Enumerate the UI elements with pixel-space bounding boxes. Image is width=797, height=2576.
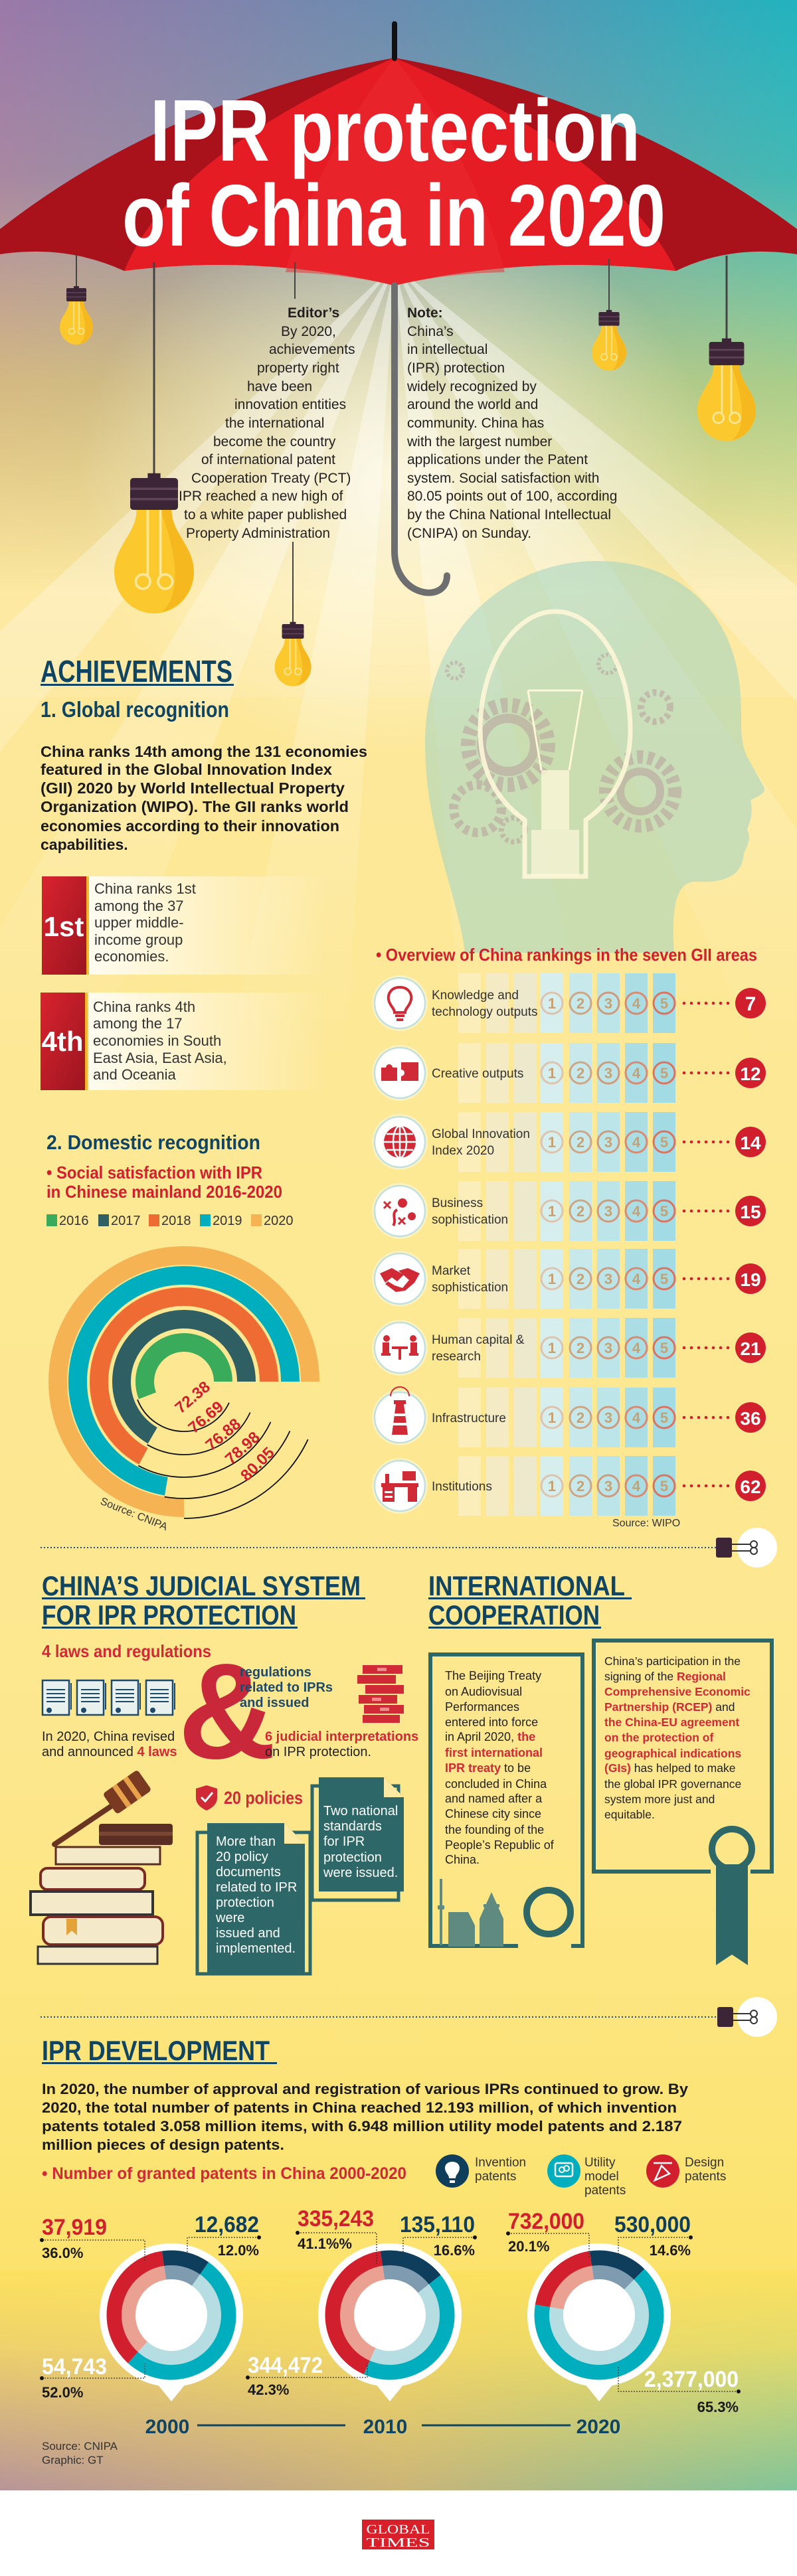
ranking row: global innovation index: 2 [576,1134,584,1151]
bulb: left small [60,254,93,345]
panel: RCEP participation: Partnership (RCEP) and [604,1700,735,1714]
ranking row: market sophistication: 19 [740,1269,761,1290]
panel: Beijing Treaty: first international [445,1746,543,1759]
ranking row: business sophistication: Business [432,1196,483,1210]
editor's note left: become the country [213,434,336,449]
editor's note right: in intellectual [407,342,487,357]
title [122,82,665,264]
text: 6 judicial interpretations [265,1730,418,1759]
subheading: 20 policies: 20 policies [224,1788,303,1808]
title: IPR protection [150,82,640,179]
illustration: gavel and books [31,1769,173,1964]
ranking row: institutions: 2 [576,1478,584,1494]
divider with bulb 1 [41,1528,777,1568]
donut: 2000: 12,682 [195,2212,259,2237]
timeline: years [145,2416,620,2438]
chart title: GII rankings: • Overview of China rankings in the seven GII areas [376,945,757,965]
text: IPR development paragraph: In 2020, the number of approval and registration of various IPRs continued to grow. By [42,2081,689,2097]
text: regulations related to IPRs: related to IPRs [240,1680,333,1695]
subheading: global recognition: 1. Global recognition [41,697,229,722]
panel: RCEP participation: China’s participation in the [604,1654,741,1668]
ranking row: infrastructure: 2 [576,1409,584,1426]
source and credit [42,2440,118,2466]
ranking row: knowledge and technology outputs: 3 [604,995,612,1012]
callout: 4th: East Asia, East Asia, [93,1050,227,1066]
text: IPR development paragraph: patents totaled 3.058 million items, with 6.948 million utility model patents and 2.187 [42,2118,682,2134]
ranking row: knowledge and technology outputs: Knowledge and [432,989,519,1003]
editor's note left: to a white paper published [184,507,347,523]
panel: RCEP participation: system more just and [604,1793,715,1806]
panel: Beijing Treaty: The Beijing Treaty [445,1669,541,1682]
ranking row: market sophistication: 1 [548,1271,556,1287]
text: revised 4 laws [42,1730,177,1759]
text: global recognition paragraph: (GII) 2020 by World Intellectual Property [41,779,345,797]
ring chart: satisfaction: 76.69 [185,1398,227,1437]
ranking row: human capital & research [372,1318,766,1378]
callout: 4th: China ranks 4th [93,999,195,1015]
chart title: social satisfaction [46,1163,282,1202]
subheading: domestic recognition: 2. Domestic recognition [46,1131,260,1154]
document: more than 20 policy documents: implemented. [216,1941,296,1956]
umbrella handle [395,285,447,593]
ranking row: business sophistication [372,1181,766,1241]
donut: 2000 [40,2212,261,2401]
legend: patent types: Design [685,2156,724,2170]
head silhouette with gears and bulb [425,561,764,953]
bulb: right small [592,259,626,370]
editor's note left: property right [257,361,339,376]
editor's note left: Cooperation Treaty (PCT) [191,471,351,486]
panel: RCEP participation: the China-EU agreement [604,1716,739,1729]
text: global recognition paragraph: China ranks 14th among the 131 economies [41,743,367,760]
ranking row: creative outputs: 3 [604,1065,612,1082]
legend: years: 2020 [264,1214,294,1228]
subheading: 4 laws and regulations: 4 laws and regulations [42,1641,211,1661]
editor's note left: achievements [269,342,355,357]
panel: RCEP participation [594,1641,772,1965]
ranking row: market sophistication: 4 [632,1271,641,1287]
ranking row: human capital & research: 4 [632,1340,641,1356]
document: more than 20 policy documents: 20 policy [216,1850,268,1864]
donut: 2000: 52.0% [42,2384,83,2401]
donut: 2000: 54,743 [42,2354,107,2379]
legend: patent types: patents [475,2170,516,2184]
panel: RCEP participation: geographical indications [604,1747,741,1760]
callout: 4th: among the 17 [93,1015,183,1032]
legend: years: 2018 [161,1214,191,1228]
ranking row: human capital & research: 1 [548,1340,556,1356]
ranking row: business sophistication: 15 [740,1202,761,1222]
panel: Beijing Treaty: China. [445,1853,480,1866]
source: WIPO: Source: WIPO [612,1518,680,1529]
ring chart: satisfaction: 72.38 [172,1378,214,1417]
donut: 2010: 344,472 [248,2353,323,2378]
callout: 1st: 1st [44,911,84,942]
panel: Beijing Treaty: IPR treaty to be [445,1761,531,1775]
document: two national standards: Two national [323,1804,398,1818]
text: 6 judicial interpretations: 6 judicial interpretations [265,1730,418,1744]
ranking row: knowledge and technology outputs: 4 [632,995,641,1012]
callout: 1st: China ranks 1st [94,880,196,897]
document: more than 20 policy documents: documents [216,1865,281,1880]
ranking row: global innovation index: Index 2020 [432,1144,494,1158]
text: IPR development paragraph: 2020, the total number of patents in China reached 12.193 million, of which invention [42,2099,677,2116]
editor's note right: China’s [407,324,454,339]
ranking row: business sophistication: 1 [548,1203,556,1220]
ranking row: infrastructure [372,1387,766,1447]
callout: 1st: income group [94,931,183,948]
source and credit: Graphic: GT [42,2454,104,2466]
editor's note left [179,305,355,541]
panel: RCEP participation: Comprehensive Economic [604,1685,751,1698]
editor's note right: with the largest number [406,434,552,449]
ranking row: institutions: 3 [604,1478,612,1494]
ranking row: market sophistication: sophistication [432,1281,508,1295]
editor's note left: the international [225,416,324,431]
heading: judicial system: FOR IPR PROTECTION [42,1599,296,1631]
editor's note right: community. China has [407,416,544,431]
ranking row: human capital & research: 2 [576,1340,584,1356]
ranking row: global innovation index: 3 [604,1134,612,1151]
callout: 1st: upper middle- [94,914,184,931]
editor's note right: Note: [407,305,443,321]
ranking row: creative outputs: 1 [548,1065,556,1082]
heading: international cooperation: COOPERATION [428,1599,600,1631]
ranking row: infrastructure: 36 [740,1408,761,1429]
ranking row: business sophistication: 4 [632,1203,641,1220]
editor's note right: widely recognized by [406,379,537,394]
callout: 4th: economies in South [93,1032,221,1049]
donut: 2020: 732,000 [508,2209,584,2234]
ranking row: knowledge and technology outputs: 5 [660,995,668,1012]
editor's note right: (IPR) protection [407,361,505,376]
panel: Beijing Treaty: the founding of the [445,1823,544,1836]
ranking row: institutions: Institutions [432,1480,492,1494]
ranking row: market sophistication: 5 [660,1271,668,1287]
donut: 2010 [246,2206,477,2401]
panel: Beijing Treaty: People’s Republic of [445,1838,555,1852]
donut: 2000: 37,919 [42,2215,107,2240]
donut: 2010: 335,243 [298,2206,374,2231]
text: IPR development paragraph [42,2081,689,2153]
callout: 4th [41,993,328,1090]
ranking row: global innovation index: 5 [660,1134,668,1151]
logo: Global Times [362,2520,434,2550]
text: 6 judicial interpretations: on IPR protection. [265,1745,371,1759]
donut: 2020: 14.6% [650,2242,691,2259]
ranking row: human capital & research: Human capital & [432,1333,525,1347]
document: two national standards: protection [323,1850,382,1865]
ring chart: satisfaction: 78.98 [222,1428,264,1468]
ranking row: human capital & research: 21 [740,1338,761,1359]
editor's note right: (CNIPA) on Sunday. [407,526,531,541]
legend: patent types: patents [584,2184,626,2198]
heading: judicial system [42,1570,365,1631]
legend: patent types: Invention [475,2156,526,2170]
editor's note left: By 2020, [281,324,336,339]
light rays [0,199,797,1062]
legend: years [46,1214,294,1228]
panel: RCEP participation: the global IPR governance [604,1777,741,1791]
document: more than 20 policy documents: More than [216,1834,276,1849]
icon: red book stack [357,1665,404,1723]
text: revised 4 laws: and announced 4 laws [42,1745,177,1759]
legend: patent types: Utility [584,2156,616,2170]
donut: 2020: 2,377,000 [644,2367,739,2392]
panel: RCEP participation: on the protection of [604,1731,713,1744]
heading: IPR development: IPR DEVELOPMENT [42,2035,270,2066]
ranking row: knowledge and technology outputs: 1 [548,995,556,1012]
donut: 2010: 42.3% [248,2381,289,2398]
panel: RCEP participation: signing of the Regional [604,1670,726,1683]
ranking row: human capital & research: 5 [660,1340,668,1356]
panel: Beijing Treaty: in April 2020, the [445,1730,535,1743]
heading: achievements: ACHIEVEMENTS [41,654,232,688]
ranking row: market sophistication: 3 [604,1271,612,1287]
editor's note right: by the China National Intellectual [407,507,611,523]
ranking row: institutions: 1 [548,1478,556,1494]
ranking row: market sophistication: 2 [576,1271,584,1287]
chart title: granted patents: • Number of granted patents in China 2000-2020 [42,2164,406,2183]
document: two national standards [312,1777,404,1900]
ranking row: market sophistication: Market [432,1264,471,1278]
ranking row: knowledge and technology outputs: 7 [745,993,756,1015]
editor's note left: of international patent [201,452,335,467]
donut: 2020: 20.1% [508,2238,549,2255]
subheading: 20 policies [196,1785,303,1811]
bulb: right big [697,256,756,442]
callout: 1st: among the 37 [94,898,184,914]
editor's note right: applications under the Patent [407,452,588,467]
text: IPR development paragraph: million pieces of design patents. [42,2136,284,2153]
donut: 2020: 530,000 [614,2212,691,2237]
legend: years: 2016 [59,1214,89,1228]
divider with bulb 2 [41,1997,777,2037]
icon: ampersand: & [178,1635,276,1787]
ranking row: global innovation index: Global Innovation [432,1127,530,1141]
ranking row: infrastructure: 3 [604,1409,612,1426]
source and credit: Source: CNIPA [42,2440,118,2453]
ranking row: creative outputs: 12 [740,1064,761,1084]
ranking row: market sophistication [372,1249,766,1309]
editor's note right: 80.05 points out of 100, according [407,489,617,504]
editor's note right: around the world and [407,397,538,412]
panel: Beijing Treaty [430,1654,582,1947]
panel: Beijing Treaty: concluded in China [445,1777,547,1791]
ranking row: business sophistication: 2 [576,1203,584,1220]
editor's note left: Property Administration [186,526,330,541]
callout: 1st: economies. [94,948,169,965]
ranking row: infrastructure: Infrastructure [432,1411,506,1425]
bulb: left big [114,262,194,613]
chart title: social satisfaction: in Chinese mainland 2016-2020 [46,1182,282,1202]
ranking row: global innovation index [372,1112,766,1172]
ranking row: human capital & research: 3 [604,1340,612,1356]
ranking row: business sophistication: 3 [604,1203,612,1220]
callout: 4th: and Oceania [93,1066,177,1083]
ranking row: global innovation index: 4 [632,1134,641,1151]
panel: Beijing Treaty: on Audiovisual [445,1685,522,1698]
ring chart: satisfaction [58,1255,310,1533]
panel: Beijing Treaty: Chinese city since [445,1807,541,1820]
ranking row: business sophistication: 5 [660,1203,668,1220]
ranking row: knowledge and technology outputs: technology outputs [432,1005,538,1019]
text: global recognition paragraph: capabilities. [41,836,128,853]
donut: 2010: 41.1%% [298,2235,352,2252]
legend: years: 2017 [111,1214,141,1228]
document: more than 20 policy documents: issued and [216,1926,280,1941]
panel: Beijing Treaty: and named after a [445,1792,543,1805]
callout: 4th: 4th [41,1026,84,1057]
editor's note left: have been [247,379,312,394]
text: global recognition paragraph: featured in the Global Innovation Index [41,761,332,778]
timeline: years: 2000 [145,2416,189,2438]
legend: patent types [436,2154,726,2198]
text: revised 4 laws: In 2020, China revised [42,1730,175,1744]
document: more than 20 policy documents: were [215,1911,244,1925]
heading: international cooperation: INTERNATIONAL [428,1570,625,1601]
icons: patent documents [43,1680,175,1715]
legend: patent types: model [584,2170,619,2184]
ring chart: satisfaction: 80.05 [237,1444,278,1485]
legend: years: 2019 [213,1214,242,1228]
document: more than 20 policy documents: protection [216,1895,274,1910]
panel: RCEP participation: equitable. [604,1808,655,1821]
panel: RCEP participation: (GIs) has helped to make [604,1761,735,1775]
editor's note left: innovation entities [234,397,346,412]
heading: judicial system: CHINA’S JUDICIAL SYSTEM [42,1570,361,1601]
donut: 2000: 36.0% [42,2245,83,2261]
donut: 2010: 16.6% [434,2242,475,2259]
editor's note left: Editor’s [288,305,339,321]
donut: 2020: 65.3% [697,2399,739,2415]
ring chart: satisfaction: Source: CNIPA [99,1496,169,1533]
donut: 2010: 135,110 [400,2212,475,2237]
ranking row: institutions [372,1456,766,1516]
umbrella canopy [0,21,797,285]
ranking row: knowledge and technology outputs [372,973,766,1033]
editor's note right [406,305,617,541]
ranking row: infrastructure: 5 [660,1409,668,1426]
legend: patent types: patents [685,2170,726,2184]
title: of China in 2020 [122,167,665,264]
text: global recognition paragraph: Organization (WIPO). The GII ranks world [41,798,349,815]
ranking row: global innovation index: 14 [740,1133,761,1153]
timeline: years: 2020 [576,2416,620,2438]
text: regulations related to IPRs [240,1665,333,1710]
ranking row: infrastructure: 4 [632,1409,641,1426]
panel: Beijing Treaty: Performances [445,1700,519,1714]
logo: Global Times: GLOBAL [367,2522,430,2537]
text: regulations related to IPRs: regulations [240,1665,311,1680]
editor's note right: system. Social satisfaction with [407,471,599,486]
ranking row: human capital & research: research [432,1350,481,1364]
ranking row: institutions: 62 [740,1477,761,1497]
text: regulations related to IPRs: and issued [240,1696,309,1710]
ranking row: institutions: 5 [660,1478,668,1494]
text: global recognition paragraph [41,743,367,853]
bulb: center [275,262,311,686]
panel: Beijing Treaty: entered into force [445,1716,538,1729]
ranking row: creative outputs: Creative outputs [432,1067,523,1081]
ranking row: creative outputs [372,1043,766,1103]
chart title: social satisfaction: • Social satisfaction with IPR [46,1163,262,1182]
ranking row: infrastructure: 1 [548,1409,556,1426]
ranking row: knowledge and technology outputs: 2 [576,995,584,1012]
ranking row: creative outputs: 2 [576,1065,584,1082]
callout: 1st [42,876,328,975]
ranking row: global innovation index: 1 [548,1134,556,1151]
donut: 2020 [506,2209,741,2415]
text: global recognition paragraph: economies according to their innovation [41,817,339,835]
heading: international cooperation [428,1570,632,1631]
document: more than 20 policy documents [197,1823,310,1974]
editor's note left: IPR reached a new high of [179,489,343,504]
ranking row: business sophistication: sophistication [432,1213,508,1227]
document: more than 20 policy documents: related to IPR [216,1880,297,1895]
ranking row: creative outputs: 5 [660,1065,668,1082]
donut: 2000: 12.0% [218,2242,259,2259]
ranking row: creative outputs: 4 [632,1065,641,1082]
document: two national standards: were issued. [323,1866,398,1880]
logo: Global Times: TIMES [367,2536,430,2550]
timeline: years: 2010 [363,2416,407,2438]
ranking row: institutions: 4 [632,1478,641,1494]
document: two national standards: for IPR [323,1834,365,1849]
ring chart: satisfaction: 76.88 [203,1415,244,1455]
document: two national standards: standards [323,1819,382,1834]
